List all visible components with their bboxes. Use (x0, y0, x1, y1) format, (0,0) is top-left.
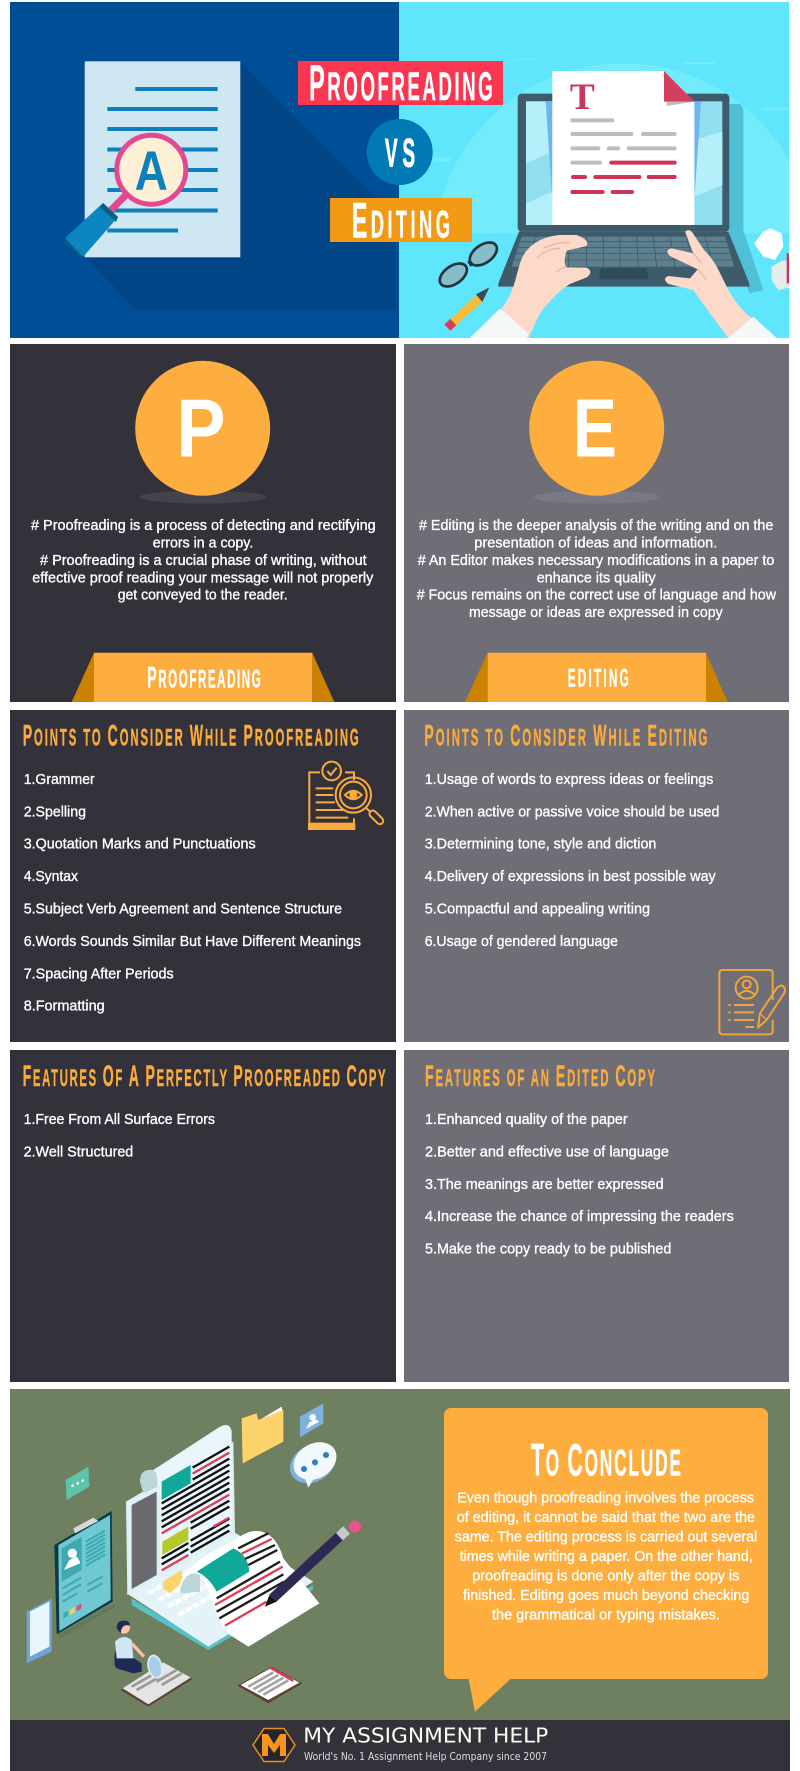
text: editing definition (417, 517, 776, 621)
text: proofreading definition: effective proof reading your message will not properly (32, 569, 374, 586)
speech bubble (283, 1435, 343, 1491)
panel: points to consider while editing (404, 710, 789, 1042)
text: editing definition: # Editing is the deeper analysis of the writing and on the (419, 517, 773, 534)
callout text (455, 1490, 757, 1623)
panel: features of an edited copy (404, 1050, 789, 1382)
shadow under circle (534, 490, 660, 504)
list: 4.Delivery of expressions in best possible way (425, 868, 716, 885)
tagline: World's No. 1 Assignment Help Company since 2007 (304, 1751, 547, 1763)
list: 5.Subject Verb Agreement and Sentence Structure (24, 900, 342, 917)
panel: hero banner (10, 2, 789, 338)
callout text: times while writing a paper. On the other hand, (460, 1548, 753, 1565)
callout text: of editing, it cannot be said that the two are the (457, 1509, 755, 1526)
phone (27, 1598, 52, 1663)
list: 8.Formatting (24, 998, 105, 1015)
hero left background (10, 2, 399, 338)
callout heading: TO CONCLUDE (531, 1436, 681, 1486)
label: Editing (330, 194, 472, 249)
list: 6.Usage of gendered language (425, 933, 618, 950)
text: editing definition: enhance its quality (537, 569, 656, 586)
chat icon (66, 1467, 89, 1500)
list: 6.Words Sounds Similar But Have Different Meanings (24, 933, 361, 950)
list: 2.Well Structured (24, 1143, 133, 1160)
text: proofreading definition (31, 517, 376, 604)
callout text: same. The editing process is carried out several (455, 1529, 757, 1546)
list: 1.Usage of words to express ideas or feelings (425, 771, 713, 788)
text: proofreading definition: errors in a copy. (153, 534, 253, 551)
ribbon: Proofreading: PROOFREADING (147, 661, 261, 694)
list: 2.Spelling (24, 803, 86, 820)
illustration: document with magnifier: A (135, 139, 168, 202)
contact card (300, 1403, 323, 1437)
crumpled paper (754, 228, 783, 260)
list: 1.Grammer (24, 771, 95, 788)
person with book and magnifier (114, 1621, 193, 1707)
list (425, 771, 719, 950)
list (24, 771, 361, 1015)
curled upper document (140, 1425, 232, 1593)
text: proofreading definition: # Proofreading is a crucial phase of writing, without (40, 552, 367, 569)
footer (10, 1720, 790, 1771)
ribbon: Editing: EDITING (568, 665, 629, 693)
list (425, 1111, 734, 1258)
list: 1.Free From All Surface Errors (24, 1111, 215, 1128)
list: 3.The meanings are better expressed (425, 1176, 664, 1193)
heading: FEATURES OF A PERFECTLY PROOFREADED COPY (23, 1059, 386, 1092)
laptop (126, 1442, 313, 1650)
brand name: MY ASSIGNMENT HELP (303, 1724, 548, 1748)
icon: letter E circle: E (573, 382, 617, 475)
callout text: the grammatical or typing mistakes. (492, 1606, 720, 1623)
shadow under circle (140, 490, 266, 504)
label: Proofreading: PROOFREADING (309, 55, 493, 112)
icon: checklist with magnifier and eye (308, 762, 385, 830)
panel: proofreading definition (10, 344, 396, 702)
small notebook (237, 1667, 302, 1703)
white document (552, 71, 694, 225)
curled lower document (179, 1531, 319, 1647)
left hand (502, 235, 590, 338)
pen (265, 1521, 361, 1607)
text: editing definition: presentation of ideas and information. (474, 534, 717, 551)
pencil (447, 287, 489, 328)
heading: POINTS TO CONSIDER WHILE PROOFREADING (23, 719, 359, 752)
list: 2.Better and effective use of language (425, 1143, 669, 1160)
illustration: isometric laptop and documents (27, 1403, 361, 1707)
label: VS circle: VS (385, 131, 415, 176)
icon: letter P circle: P (176, 382, 226, 475)
text: proofreading definition: get conveyed to the reader. (118, 587, 288, 604)
list: 3.Quotation Marks and Punctuations (24, 836, 256, 853)
icon: letter P circle (135, 361, 270, 496)
list: 4.Syntax (24, 868, 78, 885)
list: 4.Increase the chance of impressing the readers (425, 1208, 734, 1225)
label: Editing: EDITING (352, 194, 450, 249)
clipboard (54, 1511, 115, 1639)
heading: FEATURES OF AN EDITED COPY (425, 1059, 655, 1092)
label: VS circle (367, 119, 433, 185)
callout text: Even though proofreading involves the process (457, 1490, 754, 1507)
panel: editing definition (404, 344, 789, 702)
panel: conclusion (10, 1389, 790, 1720)
icon: letter E circle (529, 361, 664, 496)
text: editing definition: # An Editor makes necessary modifications in a paper to (418, 552, 774, 569)
illustration: laptop with document and hands: T (570, 77, 595, 118)
list (24, 1111, 215, 1160)
panel: features of a perfectly proofreaded copy (10, 1050, 396, 1382)
heading: POINTS TO CONSIDER WHILE EDITING (424, 719, 707, 752)
hero right background (399, 2, 789, 338)
list: 3.Determining tone, style and diction (425, 836, 656, 853)
list: 2.When active or passive voice should be used (425, 803, 719, 820)
icon: profile document with pencil (719, 970, 785, 1034)
callout text: proofreading is done only after the copy is (472, 1567, 739, 1584)
list: 1.Enhanced quality of the paper (425, 1111, 628, 1128)
illustration: laptop with document and hands (434, 58, 789, 338)
list: 5.Make the copy ready to be published (425, 1240, 671, 1258)
callout text: finished. Editing goes much beyond checking (463, 1587, 749, 1604)
glasses (438, 241, 498, 288)
list: 7.Spacing After Periods (24, 965, 174, 982)
callout: to conclude (444, 1408, 768, 1712)
list: 5.Compactful and appealing writing (425, 900, 650, 917)
text: editing definition: message or ideas are expressed in copy (469, 604, 723, 621)
icon: logo (253, 1728, 295, 1762)
right hand (665, 230, 753, 338)
ribbon: Proofreading (72, 653, 334, 702)
ribbon: Editing (465, 653, 728, 702)
text: proofreading definition: # Proofreading is a process of detecting and rectifying (31, 517, 376, 534)
text: editing definition: # Focus remains on the correct use of language and how (417, 587, 776, 604)
illustration: document with magnifier (65, 61, 396, 310)
folder (242, 1407, 283, 1463)
panel: points to consider while proofreading (10, 710, 396, 1042)
